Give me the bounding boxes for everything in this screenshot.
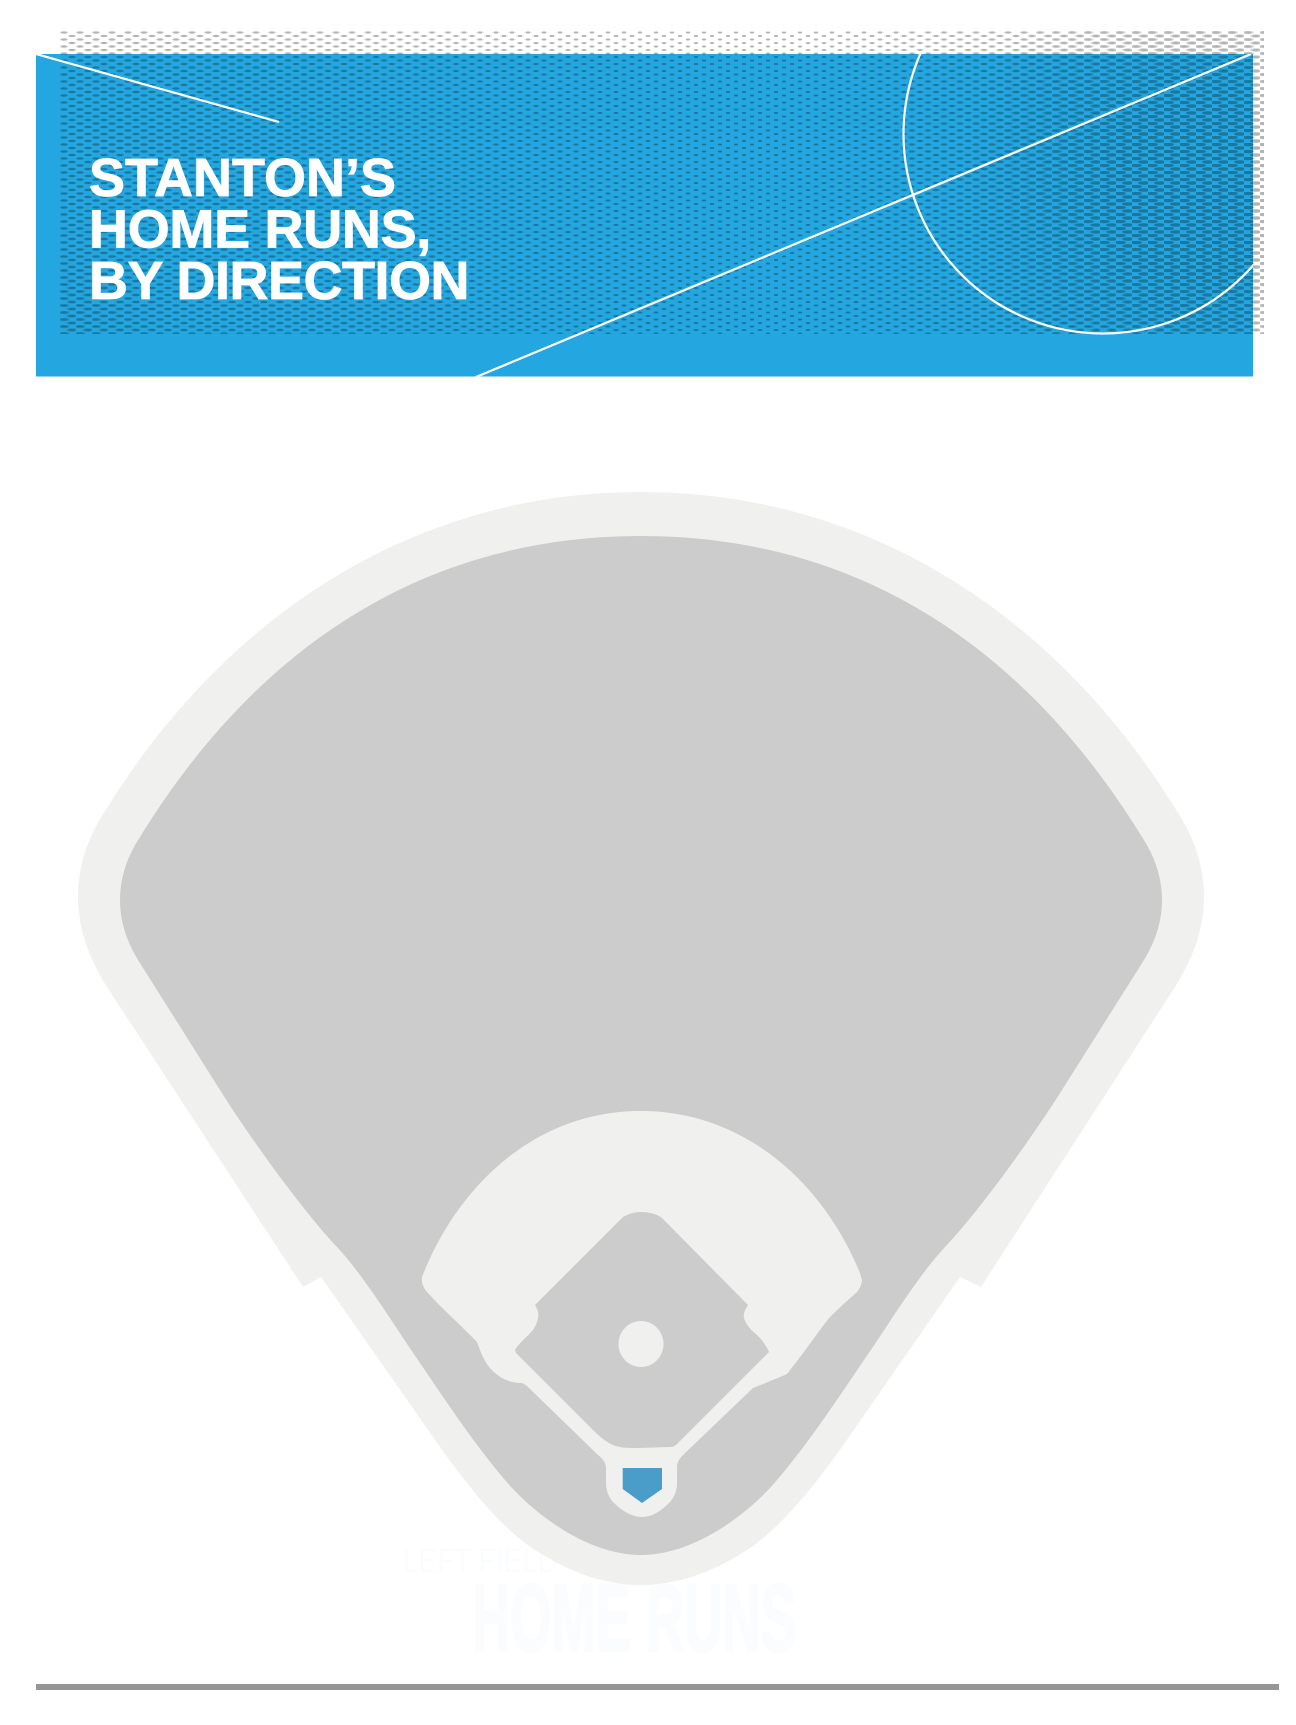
halftone texture xyxy=(60,31,1264,334)
title: BY DIRECTION xyxy=(89,251,469,311)
header banner xyxy=(36,31,1264,376)
footer rule xyxy=(36,1684,1279,1690)
infield grass diamond xyxy=(515,1212,769,1448)
outer warning track xyxy=(78,492,1204,1585)
field lines xyxy=(36,54,1253,376)
title: HOME RUNS, xyxy=(89,200,431,260)
title xyxy=(89,148,469,311)
infield dirt xyxy=(422,1111,862,1517)
faint home runs label: HOME RUNS xyxy=(472,1565,796,1672)
outfield grass xyxy=(120,536,1162,1555)
banner background xyxy=(36,54,1253,376)
faint left field label: LEFT FIELD xyxy=(403,1542,558,1579)
title: STANTON’S xyxy=(89,148,396,208)
pitcher's mound xyxy=(618,1321,664,1367)
home plate xyxy=(623,1468,662,1503)
baseball field diagram xyxy=(78,492,1204,1585)
